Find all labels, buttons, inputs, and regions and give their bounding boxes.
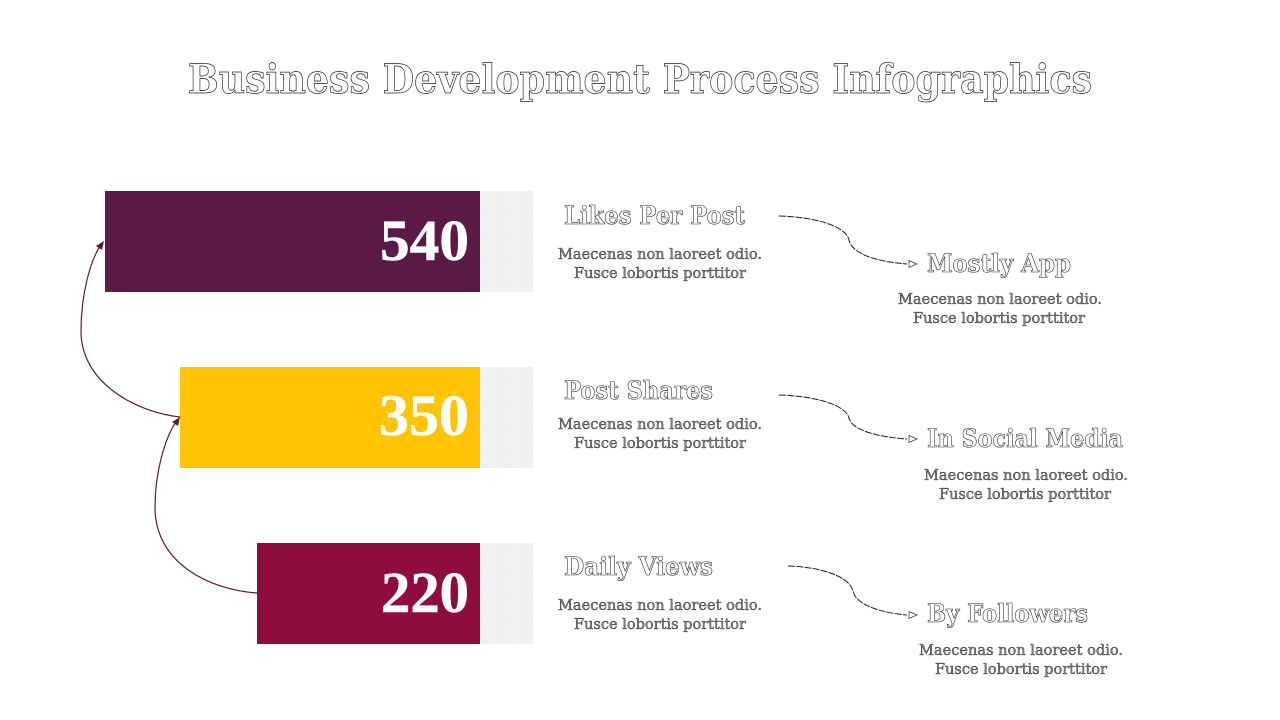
description <box>558 247 762 282</box>
grey bar end <box>480 191 533 292</box>
description <box>919 643 1123 678</box>
number 220: 220 <box>381 560 469 625</box>
description: Maecenas non laoreet odio. <box>558 247 762 263</box>
description: Fusce lobortis porttitor <box>913 311 1085 327</box>
panel: post shares bar <box>180 367 533 468</box>
purple bar <box>105 191 480 292</box>
heading: By Followers <box>927 599 1088 628</box>
block: post shares <box>558 376 762 452</box>
description <box>558 598 762 633</box>
block: by followers <box>919 599 1123 678</box>
yellow bar <box>180 367 480 468</box>
description: Maecenas non laoreet odio. <box>919 643 1123 659</box>
number 350: 350 <box>379 383 469 448</box>
block: likes per post <box>558 201 762 282</box>
crimson bar <box>257 543 480 644</box>
arrow: post shares to likes <box>81 241 180 417</box>
heading: In Social Media <box>927 424 1123 453</box>
title: Business Development Process Infographics <box>188 56 1092 103</box>
arrow: views to followers <box>788 566 917 618</box>
grey bar end <box>480 543 533 644</box>
description: Maecenas non laoreet odio. <box>898 292 1102 308</box>
description <box>558 417 762 452</box>
grey bar end <box>480 367 533 468</box>
heading: Likes Per Post <box>564 201 745 230</box>
panel: daily views bar <box>257 543 533 644</box>
heading: Daily Views <box>564 552 713 581</box>
heading: Mostly App <box>927 249 1071 278</box>
block: mostly app <box>898 249 1102 327</box>
description: Maecenas non laoreet odio. <box>558 598 762 614</box>
description: Fusce lobortis porttitor <box>935 662 1107 678</box>
block: in social media <box>924 424 1128 503</box>
description: Fusce lobortis porttitor <box>574 436 746 452</box>
arrow: likes to mostly app <box>779 216 917 268</box>
arrow: daily views to post shares <box>155 417 257 593</box>
description: Fusce lobortis porttitor <box>939 487 1111 503</box>
block: daily views <box>558 552 762 633</box>
arrow: shares to social media <box>779 395 917 442</box>
description <box>898 292 1102 327</box>
description: Maecenas non laoreet odio. <box>924 468 1128 484</box>
description <box>924 468 1128 503</box>
description: Maecenas non laoreet odio. <box>558 417 762 433</box>
heading: Post Shares <box>564 376 713 405</box>
description: Fusce lobortis porttitor <box>574 617 746 633</box>
number 540: 540 <box>380 208 469 273</box>
panel: likes per post bar <box>105 191 533 292</box>
description: Fusce lobortis porttitor <box>574 266 746 282</box>
